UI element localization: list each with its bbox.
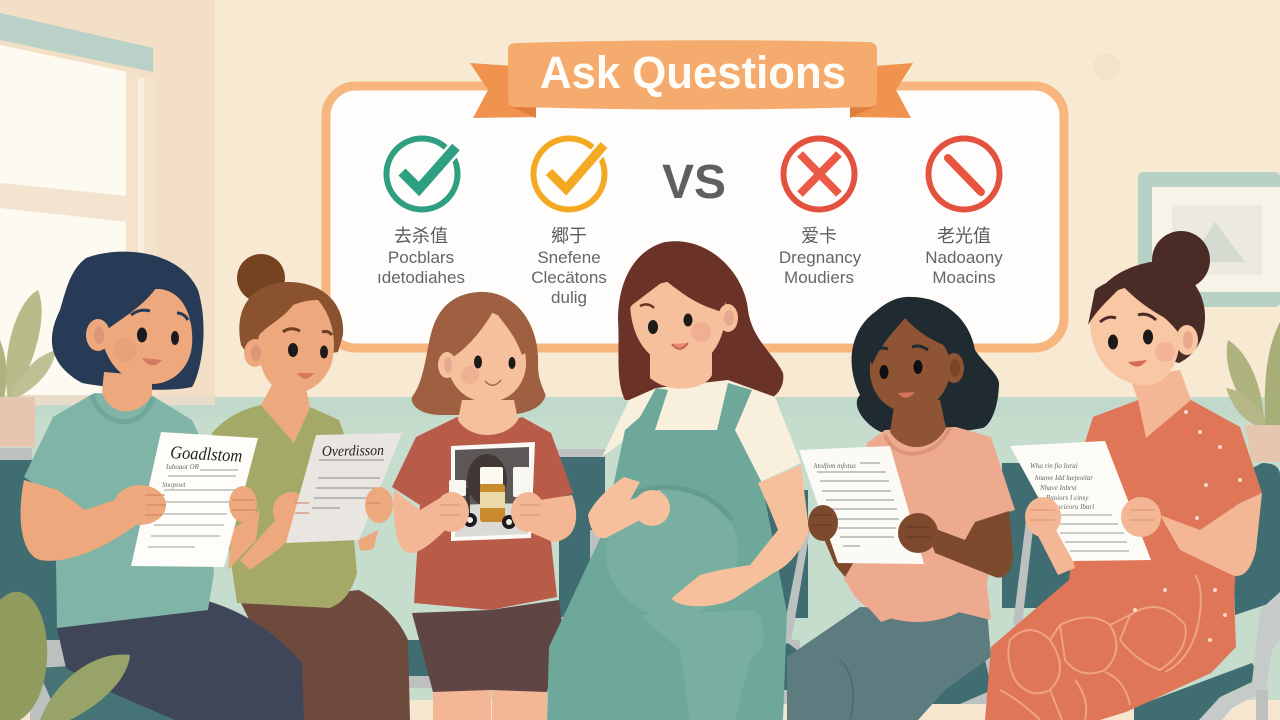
handout: paper five: htolfom mfotus [814, 462, 856, 470]
icon: green check [386, 138, 458, 210]
handout: paper one: Snopswt [162, 481, 186, 489]
label: column two: 郷于 [551, 226, 587, 246]
handout: paper two: Overdisson [322, 443, 384, 460]
label: column two: Clecätons [531, 268, 607, 287]
dress pattern [1000, 575, 1201, 720]
panel: question board [326, 40, 1064, 348]
label: column four: 老光值 [937, 226, 991, 246]
label: column four: Nadoaony [925, 248, 1003, 267]
label: column two: dulig [551, 288, 587, 307]
person: pregnant woman in teal overalls [547, 241, 809, 720]
icon: amber check [534, 138, 604, 210]
waiting room chairs [0, 448, 1280, 720]
title: Ask Questions [540, 47, 846, 98]
label: column one: 去杀值 [394, 226, 448, 246]
handout: paper six: Raoiors I cinsy [1045, 494, 1089, 502]
handout: paper one: Goadlstom [170, 442, 243, 466]
handout: paper six: Nhave Inbrst [1039, 484, 1077, 492]
person: olive shirt woman [212, 254, 410, 720]
handout: paper six: hnawe Idd luepoelar [1035, 474, 1093, 482]
label: column four [925, 226, 1003, 287]
label: column three: Dregnancy [779, 248, 862, 267]
handout: paper six: Wha rin fio Iurai [1030, 462, 1078, 470]
handout: paper six: Iwocieoru Ibarl [1049, 503, 1094, 511]
handout: paper one [131, 432, 258, 567]
banner ribbon [470, 40, 913, 118]
icon: right wall plant [1226, 322, 1280, 462]
icon: red prohibited sign [928, 138, 1000, 210]
icon: red cross [784, 138, 854, 210]
handout: paper five [799, 446, 924, 564]
label: column two: Snefene [537, 248, 601, 267]
person: woman with dark hair and pink shirt [787, 297, 1015, 720]
handout: paper two [286, 433, 402, 543]
label: column one: Pocblars [388, 248, 454, 267]
icon: window plant [0, 290, 56, 447]
label: column three: Moudiers [784, 268, 854, 287]
wall picture frame [1138, 172, 1280, 307]
label: column three: 爱卡 [801, 226, 837, 246]
label: column two [531, 226, 607, 307]
label: column one [377, 226, 465, 287]
versus label: VS [662, 156, 726, 209]
person: red shirt woman with photo [392, 292, 576, 720]
icon: foreground plant [0, 592, 130, 720]
handout: paper one: Iuboaot OR [165, 463, 200, 471]
label: column one: ıdetodiahes [377, 268, 465, 287]
person: teal shirt woman [21, 252, 304, 720]
label: column four: Moacins [932, 268, 996, 287]
person: woman in coral patterned dress [985, 231, 1262, 720]
handout: paper six [1010, 441, 1151, 561]
photo of medicine bottle [449, 442, 535, 541]
label: column three [779, 226, 862, 287]
window [0, 13, 215, 405]
